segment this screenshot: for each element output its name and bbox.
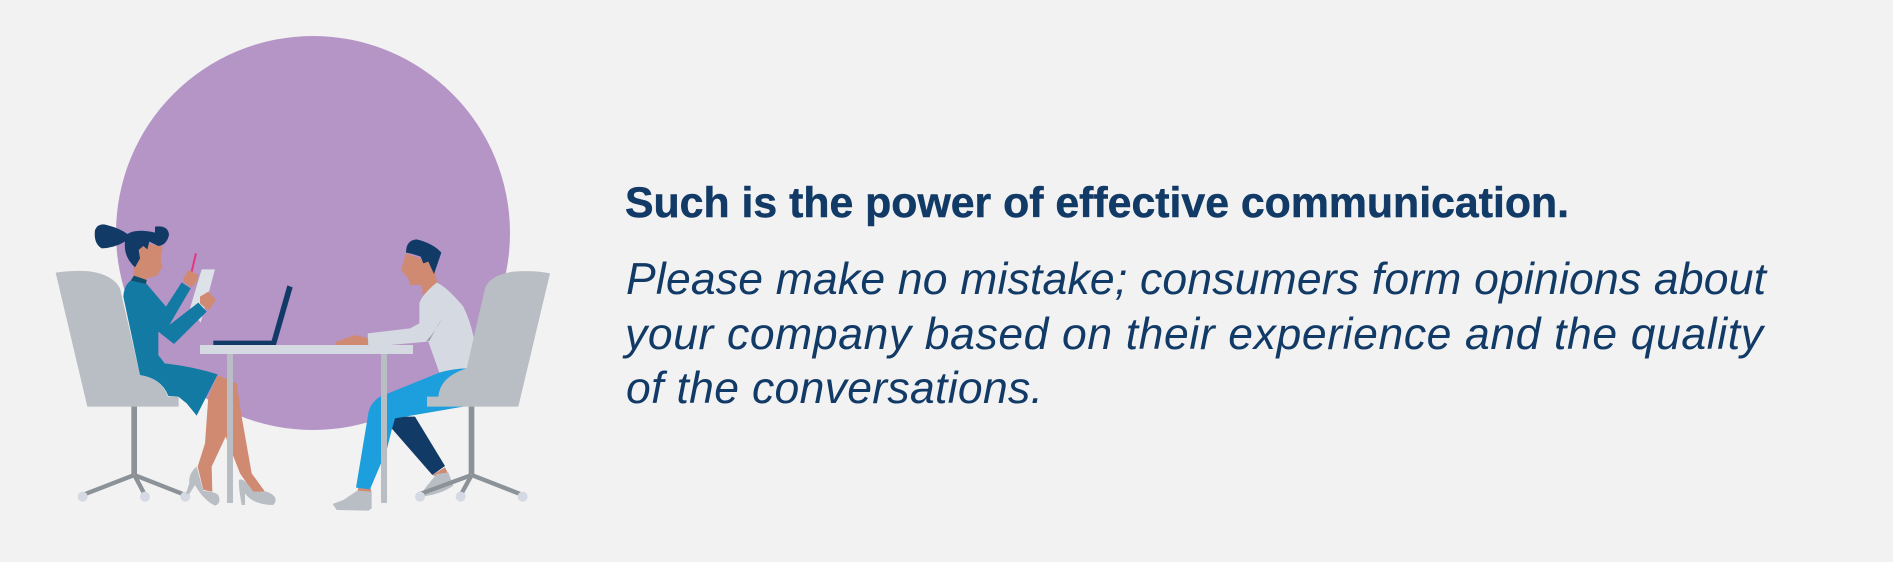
laptop xyxy=(213,285,293,345)
man's hand xyxy=(335,335,369,346)
body text: of the conversations. xyxy=(626,364,1043,413)
desk xyxy=(200,345,413,503)
dress collar xyxy=(131,276,147,284)
illustration: man seated on chair xyxy=(333,239,550,511)
illustration: woman seated on chair xyxy=(56,224,276,506)
woman's shoes xyxy=(186,467,276,506)
purple background circle xyxy=(116,36,510,430)
body text: Please make no mistake; consumers form opinions about xyxy=(626,255,1768,304)
body text: your company based on their experience and the quality xyxy=(622,310,1766,359)
man's front shoe xyxy=(333,488,372,511)
woman's teal dress xyxy=(123,281,218,416)
heading: Such is the power of effective communication. xyxy=(625,179,1569,227)
man's rear leg xyxy=(392,417,453,497)
man's head and neck xyxy=(401,253,437,298)
woman's office chair xyxy=(56,271,190,502)
woman's hands xyxy=(183,270,216,311)
woman's hair xyxy=(95,224,169,267)
woman's legs xyxy=(198,375,265,493)
body text xyxy=(622,255,1768,413)
man's hair xyxy=(406,239,441,274)
man's office chair xyxy=(415,271,550,502)
paper and pencil xyxy=(190,253,215,323)
man's white shirt xyxy=(368,283,474,373)
woman's head and neck xyxy=(133,242,163,283)
man's blue trousers xyxy=(356,368,467,489)
